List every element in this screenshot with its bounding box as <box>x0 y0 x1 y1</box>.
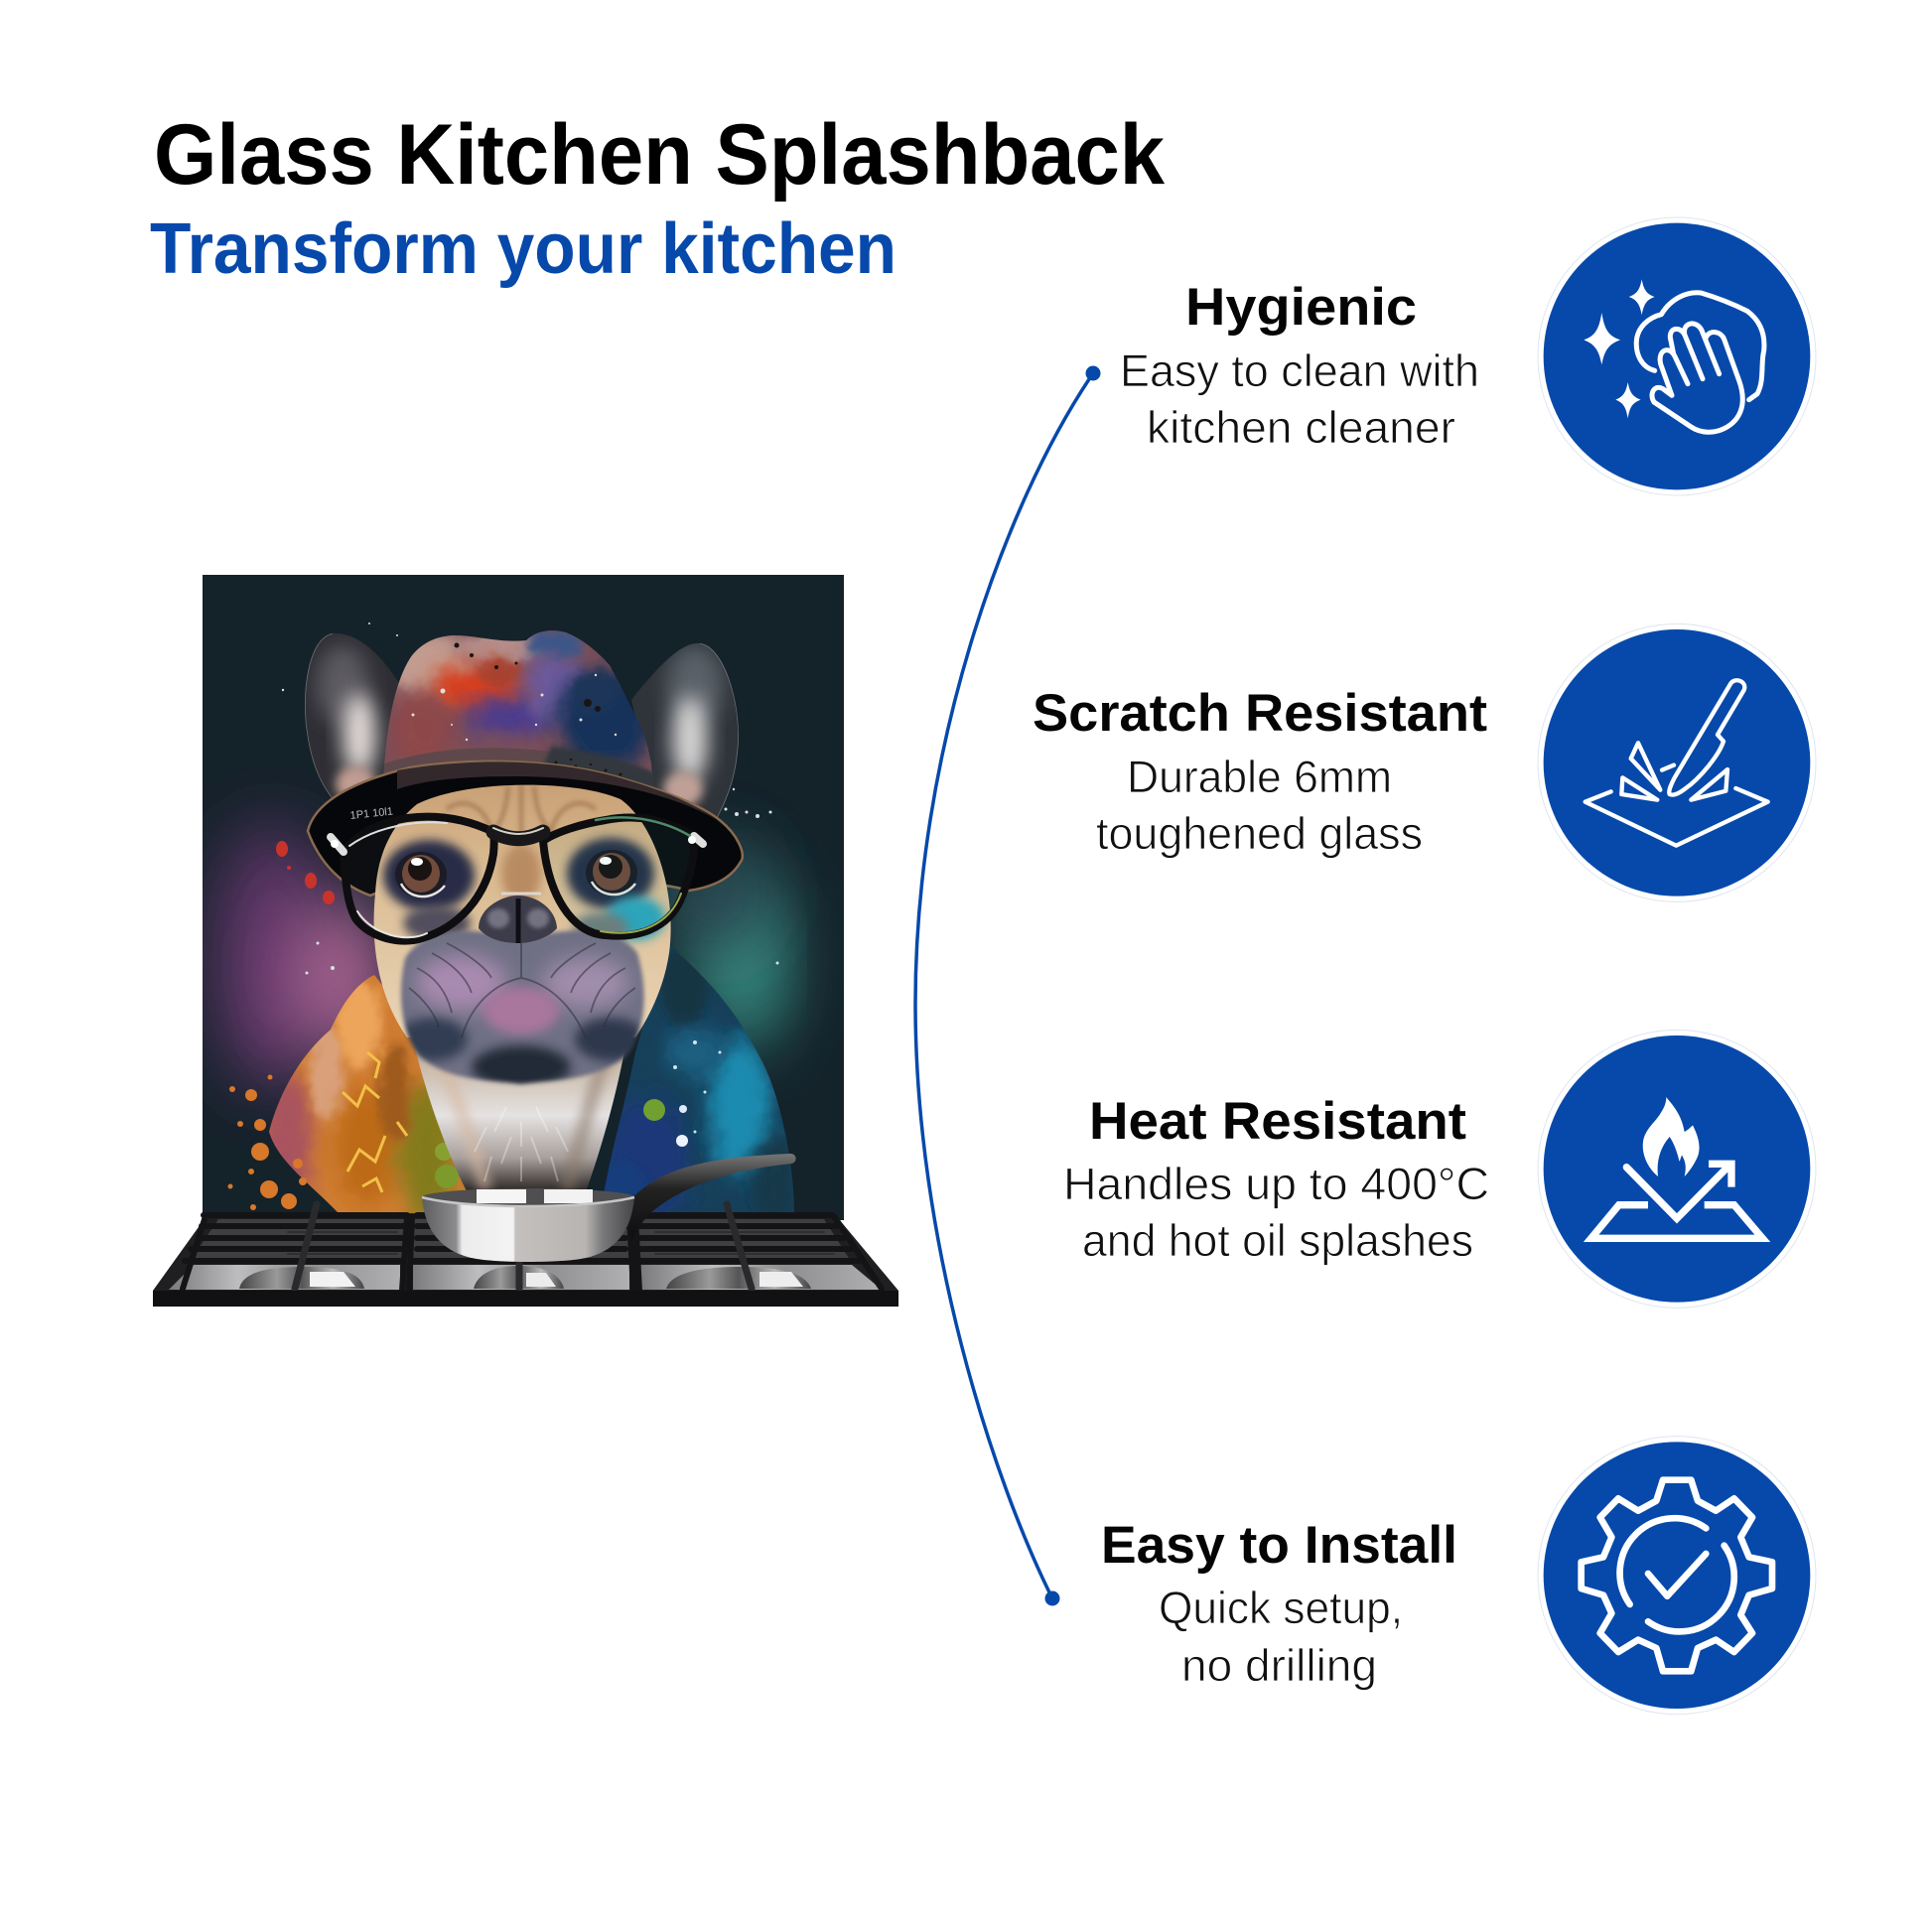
feature: Heat Resistant <box>1063 1092 1489 1266</box>
icon: knife scratching glass <box>1538 623 1816 901</box>
feature: Scratch Resistant: Durable 6mm <box>1127 752 1392 802</box>
hat label: 1P1 10l1 <box>349 806 394 822</box>
nose <box>479 894 557 943</box>
hob front strip <box>153 1291 898 1307</box>
orange droplets <box>228 1074 307 1210</box>
pan body <box>422 1197 634 1262</box>
feature: Easy to Install: Quick setup, <box>1159 1583 1403 1633</box>
gas hob <box>153 1204 898 1307</box>
product image: dog splashback above gas hob <box>153 575 898 1307</box>
feature: Scratch Resistant: toughened glass <box>1096 808 1423 859</box>
subtitle: Transform your kitchen <box>150 209 897 289</box>
feature: Easy to Install: no drilling <box>1181 1640 1377 1691</box>
feature: Heat Resistant: Heat Resistant <box>1089 1092 1466 1151</box>
robe right <box>604 945 794 1212</box>
icon: gear with check mark <box>1538 1437 1816 1715</box>
feature: Scratch Resistant <box>1033 684 1487 859</box>
red droplets <box>276 841 335 904</box>
white paint specks <box>282 622 778 975</box>
pan rim <box>422 1188 634 1206</box>
left eye <box>395 852 447 897</box>
chest <box>414 1043 623 1190</box>
grates <box>183 1204 882 1291</box>
right eye <box>586 850 637 896</box>
feature: Hygienic: Easy to clean with <box>1120 345 1479 396</box>
title: Glass Kitchen Splashback <box>154 107 1165 203</box>
hat brim <box>308 761 743 896</box>
robe left <box>269 975 467 1213</box>
hob steel plates <box>169 1219 882 1290</box>
glasses <box>331 817 703 941</box>
feature: Heat Resistant: and hot oil splashes <box>1082 1215 1473 1266</box>
muzzle <box>396 918 650 1089</box>
icon: hand wiping with cloth <box>1538 217 1816 495</box>
saucepan <box>422 1154 796 1262</box>
hat crown <box>383 630 653 786</box>
dog face <box>367 774 675 1042</box>
icon: flame reflecting on surface <box>1538 1030 1816 1308</box>
left ear <box>305 633 399 798</box>
panel: splashback artwork <box>203 575 844 1241</box>
feature: Hygienic <box>1120 278 1479 453</box>
connector arc <box>915 365 1100 1606</box>
pan handle <box>627 1154 796 1241</box>
feature: Easy to Install: Easy to Install <box>1101 1516 1457 1575</box>
right ear <box>631 643 739 817</box>
feature: Hygienic: kitchen cleaner <box>1147 402 1455 453</box>
burners <box>239 1266 811 1289</box>
feature: Scratch Resistant: Scratch Resistant <box>1033 684 1487 743</box>
feature: Hygienic: Hygienic <box>1185 278 1417 337</box>
feature: Heat Resistant: Handles up to 400°C <box>1063 1159 1489 1209</box>
feature: Easy to Install <box>1101 1516 1457 1691</box>
